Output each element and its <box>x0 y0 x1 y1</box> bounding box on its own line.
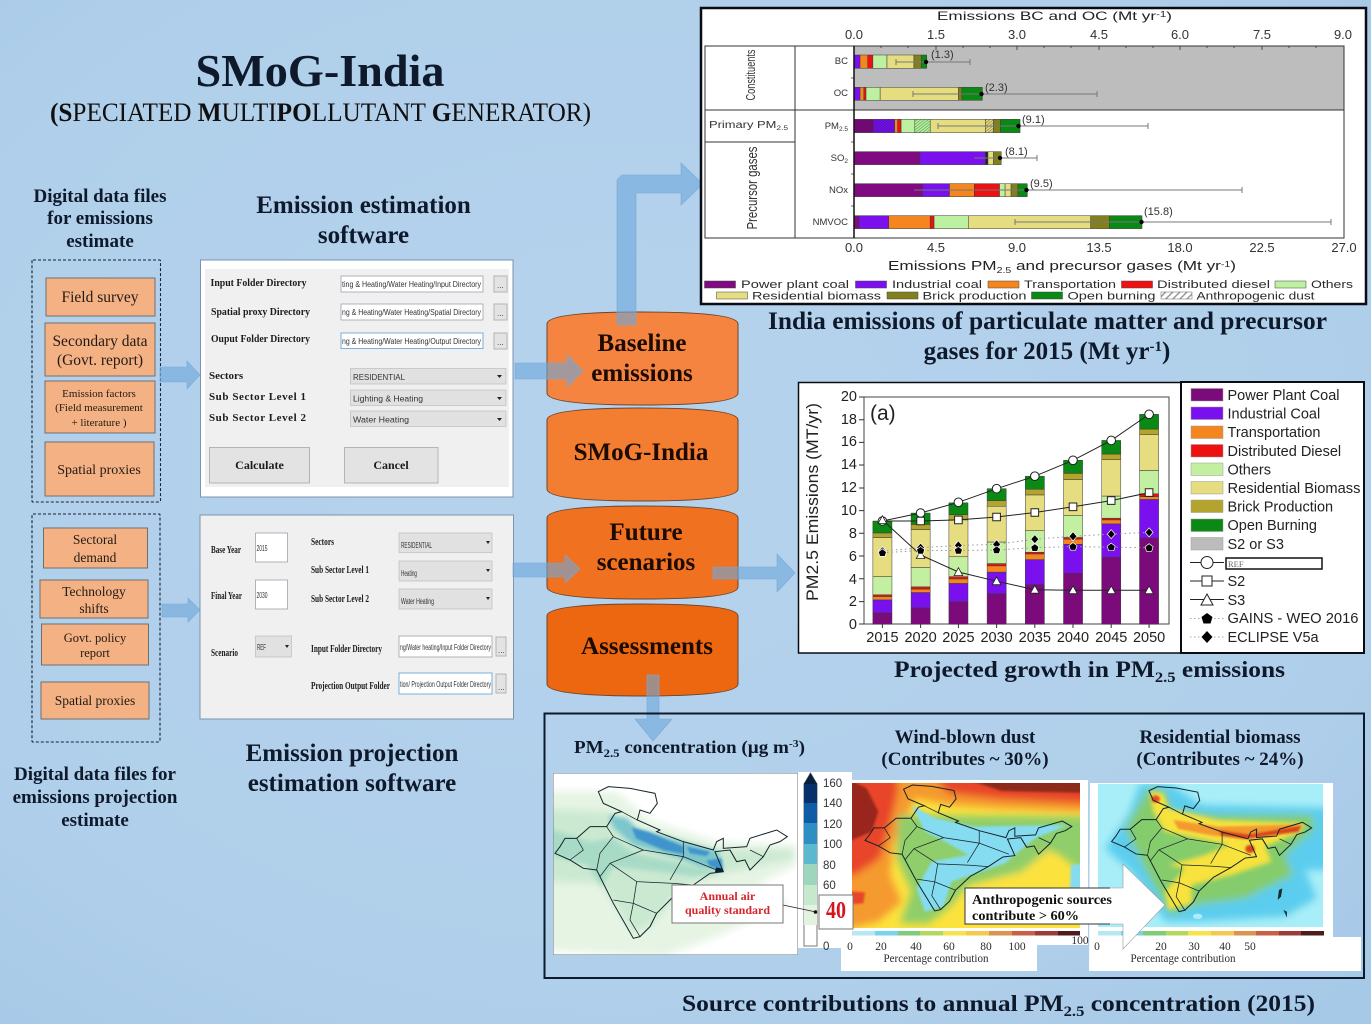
bottom axis: 9.0 <box>1008 240 1026 255</box>
panel: emissions input files: (Govt. report) <box>57 352 143 369</box>
caption: source contributions: 2.5 <box>1064 1004 1084 1020</box>
value labels: (9.5) <box>1030 178 1053 190</box>
bottom axis: 27.0 <box>1331 240 1357 255</box>
panel: emission projection software window: Sectors <box>311 536 334 548</box>
panel: emissions input files: (Field measurement <box>55 402 143 414</box>
panel: emission projection software window: Sub Sector Level 1 <box>311 564 369 576</box>
color bar: residential biomass: Percentage contribution <box>1130 953 1236 965</box>
whiskers and mean points <box>896 59 1331 225</box>
panel: emission projection software window: Projection Output Folder <box>311 680 390 692</box>
color bar: wind-blown dust <box>847 931 1089 965</box>
markers: S2 <box>917 489 1153 525</box>
bottom axis <box>845 240 1357 275</box>
top axis: 7.5 <box>1253 27 1271 42</box>
caption: projected growth: Projected growth in PM <box>894 657 1130 682</box>
bottom axis: 4.5 <box>927 240 945 255</box>
color bar: wind-blown dust: Percentage contribution <box>884 953 989 965</box>
top axis <box>845 9 1352 42</box>
caption: source contributions: concentration (2015) <box>1084 991 1315 1016</box>
subtitle: (SPECIATED MULTIPOLLUTANT GENERATOR) <box>50 98 591 127</box>
axis labels: 2030 <box>980 630 1013 646</box>
cylinder: SMoG-India: SMoG-India <box>574 439 709 466</box>
chart frame <box>705 46 1344 238</box>
scenario lines <box>882 414 1149 590</box>
legend: Open burning <box>1068 290 1156 302</box>
category labels: PM <box>825 121 839 132</box>
panel: emission estimation software window: ting & Heating/Water Heating/Input Directory <box>342 280 481 289</box>
panel: emissions input files: Field survey <box>61 289 139 306</box>
cylinder: SMoG-India <box>547 408 738 501</box>
cylinder: assessments <box>547 604 738 696</box>
panel: projected emissions legend: S3 <box>1228 593 1245 609</box>
panel: projection input files: Technology <box>62 584 126 599</box>
panel: emission projection software window: 2030 <box>256 591 268 600</box>
color bar: residential biomass: 40 <box>1219 941 1231 953</box>
heading: digital data files for emissions estimate: for emissions <box>47 208 153 229</box>
top axis: 4.5 <box>1090 27 1108 42</box>
panel: emission estimation software window <box>200 260 513 497</box>
category labels: NOx <box>829 185 848 196</box>
panel: projected emissions legend: REF <box>1228 559 1244 569</box>
panel: emission estimation software window: ng & Heating/Water Heating/Output Directory <box>342 337 481 346</box>
panel: emission estimation software window: Sub Sector Level 2 <box>209 412 306 424</box>
panel: projected emissions legend: GAINS - WEO 2016 <box>1228 611 1358 627</box>
caption: source contributions: Source contributions to annual PM <box>682 991 1027 1016</box>
color bar: wind-blown dust: 40 <box>910 941 922 953</box>
category labels: OC <box>834 88 848 99</box>
heading: digital data files for emissions projection estimate: emissions projection <box>13 787 178 808</box>
legend: Anthropogenic dust <box>1196 290 1314 302</box>
category labels: 2.5 <box>776 125 788 132</box>
panel: projected emissions legend: Industrial Coal <box>1228 406 1320 422</box>
axis labels: 2 <box>849 594 857 610</box>
map heading: residential biomass: Residential biomass <box>1140 727 1300 748</box>
bottom axis: 0.0 <box>845 240 863 255</box>
axis labels: 2025 <box>942 630 975 646</box>
panel: emission projection software window: RESIDENTIAL <box>401 541 432 550</box>
vertical axis line <box>853 46 855 238</box>
color scale: concentration: 0 <box>823 941 829 953</box>
color bar: wind-blown dust: 0 <box>847 941 853 953</box>
color bar: wind-blown dust: 100 <box>1071 935 1089 947</box>
panel: emission projection software window: Scenario <box>211 647 238 659</box>
panel: emission estimation software window: Calculate <box>235 458 285 472</box>
map heading: PM2.5 concentration: -3 <box>789 738 799 750</box>
map: residential biomass <box>1098 784 1323 927</box>
axis labels <box>841 389 1165 646</box>
panel: emission estimation software window: ... <box>497 338 504 347</box>
bottom axis: 18.0 <box>1167 240 1193 255</box>
axis labels: 20 <box>841 389 857 405</box>
value labels: (8.1) <box>1005 146 1028 158</box>
color scale: concentration: 140 <box>823 798 842 810</box>
markers: REF <box>878 410 1153 525</box>
heading: digital data files for emissions projection estimate: Digital data files for <box>14 764 177 785</box>
arrow: assessments to source contributions <box>635 675 672 741</box>
color bar: residential biomass: 20 <box>1155 941 1167 953</box>
constituents shaded band <box>854 46 1344 110</box>
panel: emission estimation software window: Water Heating <box>353 416 409 424</box>
panel: projected PM2.5 emissions chart <box>798 382 1182 653</box>
map heading: PM2.5 concentration: 2.5 <box>604 746 620 760</box>
caption: projected growth: emissions <box>1176 657 1285 682</box>
panel: projected emissions legend: S2 <box>1228 574 1245 590</box>
white backing behind maps <box>798 772 1361 971</box>
top axis: 1.5 <box>927 27 945 42</box>
panel: projected emissions legend: S2 or S3 <box>1228 537 1284 553</box>
panel: emissions input files <box>32 260 160 502</box>
color bar: wind-blown dust: 100 <box>1008 941 1026 953</box>
cylinder: future scenarios: Future <box>609 519 683 546</box>
y axis title: PM2.5 Emissions (MT/yr) <box>803 403 822 601</box>
heading: emission projection estimation software: estimation software <box>248 770 456 797</box>
value labels <box>931 49 1173 218</box>
panel: emissions input files: Secondary data <box>52 333 148 350</box>
axis labels: 6 <box>849 549 857 565</box>
color bar: residential biomass: 30 <box>1188 941 1200 953</box>
panel: emission estimation software window: Lighting & Heating <box>353 394 423 404</box>
plot axes <box>864 397 1169 624</box>
callout arrow: anthropogenic sources <box>965 864 1165 949</box>
legend: Brick production <box>922 290 1026 302</box>
bottom axis: and precursor gases (Mt yr <box>1011 258 1222 273</box>
axis labels: 14 <box>841 457 857 473</box>
panel: emission projection software window: Heating <box>401 569 417 578</box>
value labels: (1.3) <box>931 49 954 61</box>
arrow: future scenarios to projected growth chart <box>713 554 795 592</box>
arrow: emissions files to software <box>160 361 200 389</box>
axis labels: 12 <box>841 480 857 496</box>
axis labels: 10 <box>841 503 857 519</box>
axis labels: 18 <box>841 412 857 428</box>
axis labels: 2020 <box>904 630 937 646</box>
panel: emissions input files: + literature ) <box>71 417 127 429</box>
panel: projected emissions legend: Others <box>1228 462 1271 478</box>
panel: emission estimation software window: RESIDENTIAL <box>353 373 406 382</box>
axis labels: 0 <box>849 617 857 633</box>
caption: India emissions chart: India emissions of particulate matter and precursor <box>768 308 1327 335</box>
top axis: 3.0 <box>1008 27 1026 42</box>
category labels: 2 <box>844 158 848 165</box>
panel: emissions input files: Spatial proxies <box>57 463 141 478</box>
callout: annual air quality standard: quality standard <box>685 903 770 917</box>
stacked bars <box>854 55 1142 229</box>
panel: emission estimation software window: Cancel <box>373 458 409 472</box>
category labels: 2.5 <box>839 126 848 133</box>
value labels: (9.1) <box>1022 114 1045 126</box>
arrow: baseline emissions to India emissions chart <box>617 163 703 325</box>
bottom axis: 13.5 <box>1086 240 1112 255</box>
panel: emission estimation software window: ... <box>497 281 504 290</box>
axis labels: 16 <box>841 434 857 450</box>
heading: digital data files for emissions estimate: estimate <box>66 231 134 252</box>
caption: India emissions chart: gases for 2015 (Mt yr <box>924 338 1150 365</box>
color scale: concentration: 160 <box>823 778 842 790</box>
top axis: ) <box>1166 9 1172 23</box>
axis labels: 4 <box>849 572 857 588</box>
legend: Transportation <box>1024 279 1116 291</box>
panel: emission projection software window: Input Folder Directory <box>311 643 382 655</box>
panel: projection input files: Sectoral <box>73 532 117 547</box>
color bar: residential biomass: 0 <box>1094 941 1100 953</box>
top axis: -1 <box>1156 10 1167 19</box>
map heading: PM2.5 concentration: ) <box>799 737 805 758</box>
color bar: residential biomass <box>1094 931 1324 965</box>
panel: projected emissions legend: Transportation <box>1228 425 1320 441</box>
panel: projected emissions legend <box>1181 382 1364 653</box>
category labels: Constituents <box>744 50 758 100</box>
category labels: Primary PM <box>709 120 761 131</box>
top axis: 6.0 <box>1171 27 1189 42</box>
panel: projection input files <box>32 514 160 742</box>
heading: emission estimation software: Emission estimation <box>256 192 471 219</box>
value labels: (2.3) <box>985 82 1008 94</box>
callout: annual air quality standard: Annual air <box>700 889 756 903</box>
value labels: (15.8) <box>1144 206 1173 218</box>
color bar: wind-blown dust: 60 <box>943 941 955 953</box>
panel: emission estimation software window: Sub Sector Level 1 <box>209 391 306 403</box>
color scale: concentration: 120 <box>823 819 842 831</box>
panel: emission projection software window: Sub Sector Level 2 <box>311 593 369 605</box>
arrow: estimation software to baseline emissions <box>515 355 583 387</box>
panel: projected emissions legend: Power Plant Coal <box>1228 388 1340 404</box>
panel: emission projection software window: ... <box>498 646 505 655</box>
panel: emission estimation software window: Sectors <box>209 370 244 382</box>
panel: projection input files: Spatial proxies <box>55 693 135 708</box>
color scale: concentration: 100 <box>823 839 842 851</box>
arrow: projection files to software <box>162 598 200 622</box>
panel: emission estimation software window: Ouput Folder Directory <box>211 333 310 345</box>
panel: source contribution maps <box>537 714 1364 978</box>
panel: emission projection software window: ng/Water heating/Input Folder Directory <box>400 643 491 652</box>
map heading: PM2.5 concentration: PM <box>574 737 602 757</box>
axis labels: 2045 <box>1095 630 1127 646</box>
bottom axis: Emissions PM <box>888 258 970 273</box>
color bar: wind-blown dust: 80 <box>980 941 992 953</box>
axis ticks <box>859 397 1149 628</box>
callout arrow: anthropogenic sources: Anthropogenic sources <box>972 892 1112 907</box>
cylinder: assessments: Assessments <box>581 633 713 660</box>
top axis ticks <box>851 46 1316 206</box>
stacked bars by year <box>873 414 1159 624</box>
caption: projected growth: 2.5 <box>1155 670 1176 686</box>
legend: Industrial coal <box>892 279 982 291</box>
axis labels: 2035 <box>1019 630 1051 646</box>
markers: ECLIPSE V5a <box>878 528 1153 556</box>
bottom axis: 22.5 <box>1249 240 1275 255</box>
heading: digital data files for emissions estimate: Digital data files <box>34 186 166 207</box>
panel: India emissions bar chart <box>701 8 1366 304</box>
map: PM2.5 concentration <box>537 773 798 957</box>
cylinder: baseline emissions: Baseline <box>598 330 686 357</box>
category labels <box>709 50 848 230</box>
panel: projection input files: Govt. policy <box>64 631 127 645</box>
panel: projection input files: shifts <box>79 601 109 616</box>
panel: emission projection software window <box>200 515 514 719</box>
map heading: wind-blown dust: Wind-blown dust <box>895 727 1036 748</box>
top axis: Emissions BC and OC (Mt yr <box>937 9 1090 23</box>
arrow: projection software to future scenarios <box>513 555 580 583</box>
cylinder: future scenarios: scenarios <box>597 549 696 576</box>
panel: emission projection software window: Base Year <box>211 544 241 556</box>
cylinder: baseline emissions <box>547 312 738 405</box>
title: SMoG-India <box>196 45 444 96</box>
map heading: PM2.5 concentration: concentration (µg m <box>620 737 789 758</box>
bottom axis: -1 <box>1221 260 1231 269</box>
bottom axis: 2.5 <box>997 266 1012 275</box>
panel: emission projection software window: ... <box>498 683 505 692</box>
panel letter: (a) <box>870 402 896 425</box>
callout: annual air quality standard <box>672 885 853 929</box>
map heading: wind-blown dust: (Contributes ~ 30%) <box>881 749 1049 770</box>
legend: Distributed diesel <box>1157 279 1270 291</box>
legend: Power plant coal <box>741 279 849 291</box>
legend: Residential biomass <box>752 290 882 302</box>
inventory dotted lines <box>882 532 1149 553</box>
category labels: SO <box>831 153 844 164</box>
panel: projected emissions legend: ECLIPSE V5a <box>1228 630 1320 646</box>
panel: projection input files: report <box>80 646 110 660</box>
panel: emission estimation software window: ... <box>497 309 504 318</box>
axis labels: 8 <box>849 526 857 542</box>
top axis: 9.0 <box>1334 27 1352 42</box>
panel: emissions input files: Emission factors <box>62 388 136 400</box>
color bar: residential biomass: 50 <box>1244 941 1256 953</box>
panel: emission projection software window: Final Year <box>211 590 242 602</box>
category labels: BC <box>835 56 848 67</box>
color scale: concentration: 60 <box>823 880 836 892</box>
panel: emission projection software window: 2015 <box>256 544 268 553</box>
panel: emission estimation software window: Input Folder Directory <box>210 277 307 289</box>
cylinder: future scenarios <box>547 506 738 599</box>
callout: annual air quality standard: 40 <box>826 898 846 924</box>
heading: digital data files for emissions projection estimate: estimate <box>61 810 129 831</box>
panel: projected emissions legend: Open Burning <box>1228 518 1317 534</box>
markers: S3 <box>878 516 1153 594</box>
color bar: wind-blown dust: 20 <box>875 941 887 953</box>
category labels: Precursor gases <box>744 146 761 230</box>
axis labels: 2050 <box>1133 630 1165 646</box>
caption: India emissions chart: -1 <box>1150 339 1162 355</box>
color scale: concentration <box>804 773 842 953</box>
callout arrow: anthropogenic sources: contribute > 60% <box>972 908 1079 923</box>
axis labels: 2040 <box>1057 630 1089 646</box>
color scale: concentration: 80 <box>823 860 836 872</box>
caption: India emissions chart: ) <box>1162 338 1170 365</box>
panel: emission projection software window: REF <box>257 643 266 652</box>
heading: emission projection estimation software: Emission projection <box>246 740 458 767</box>
panel: projected emissions legend: Distributed Diesel <box>1228 444 1341 460</box>
bottom axis: ) <box>1230 258 1236 273</box>
map heading: residential biomass: (Contributes ~ 24%) <box>1136 749 1304 770</box>
panel: emission projection software window: Water Heating <box>401 597 434 606</box>
heading: emission estimation software: software <box>318 222 409 249</box>
panel: emission projection software window: tion/ Projection Output Folder Directory <box>400 680 491 689</box>
panel: projection input files: demand <box>74 550 117 565</box>
top axis: 0.0 <box>845 27 863 42</box>
cylinder: baseline emissions: emissions <box>591 360 693 387</box>
legend: Others <box>1311 279 1354 291</box>
panel: emission estimation software window: ng & Heating/Water Heating/Spatial Directory <box>342 308 481 317</box>
panel: emission estimation software window: Spatial proxy Directory <box>211 306 310 318</box>
map: wind-blown dust <box>852 783 1080 928</box>
legend <box>704 279 1354 302</box>
markers: GAINS WEO 2016 <box>878 543 1153 556</box>
axis labels: 2015 <box>866 630 899 646</box>
panel: projected emissions legend: Brick Production <box>1228 500 1333 516</box>
panel: projected emissions legend: Residential Biomass <box>1228 481 1360 497</box>
category labels: NMVOC <box>813 217 848 228</box>
